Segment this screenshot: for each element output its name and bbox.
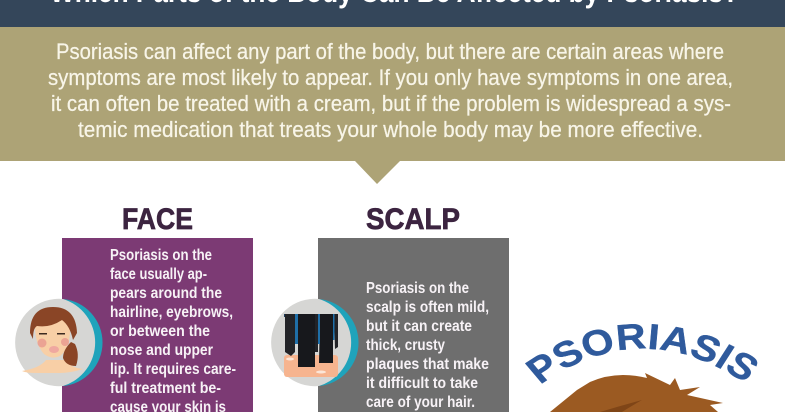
illustration: hair on head xyxy=(550,373,723,412)
scalp description text: it difficult to take xyxy=(366,375,478,392)
face description text: ful treatment be- xyxy=(110,380,221,397)
face description text: or between the xyxy=(110,323,210,340)
face description text: hairline, eyebrows, xyxy=(110,304,233,321)
intro text: symptoms are most likely to appear. If you only have symptoms in one area, xyxy=(48,65,733,90)
face description text xyxy=(110,247,236,412)
intro text: Psoriasis can affect any part of the body, but there are certain areas where xyxy=(56,39,724,64)
face description text: pears around the xyxy=(110,285,222,302)
face description text: face usually ap- xyxy=(110,266,207,283)
scalp description text: thick, crusty xyxy=(366,337,445,354)
intro text: temic medication that treats your whole body may be more effective. xyxy=(78,117,703,142)
curved title: psoriasis: PSORIASIS xyxy=(525,324,758,384)
scalp description text xyxy=(366,280,489,411)
icon: scalp with hair xyxy=(271,299,359,386)
heading: scalp: SCALP xyxy=(366,203,460,236)
scalp description text: plaques that make xyxy=(366,356,489,373)
panel: scalp xyxy=(318,238,509,412)
intro text xyxy=(48,39,733,142)
scalp description text: Psoriasis on the xyxy=(366,280,469,297)
intro text: it can often be treated with a cream, but if the problem is widespread a sys- xyxy=(51,91,731,116)
face description text: lip. It requires care- xyxy=(110,361,236,378)
scalp description text: scalp is often mild, xyxy=(366,299,489,316)
face description text: nose and upper xyxy=(110,342,213,359)
title banner xyxy=(0,0,785,27)
scalp description text: but it can create xyxy=(366,318,472,335)
heading: face: FACE xyxy=(122,203,193,236)
intro panel xyxy=(0,27,785,184)
scalp description text: care of your hair. xyxy=(366,394,475,411)
face description text: Psoriasis on the xyxy=(110,247,212,264)
panel: face xyxy=(62,238,253,412)
icon: face with psoriasis xyxy=(15,299,103,386)
